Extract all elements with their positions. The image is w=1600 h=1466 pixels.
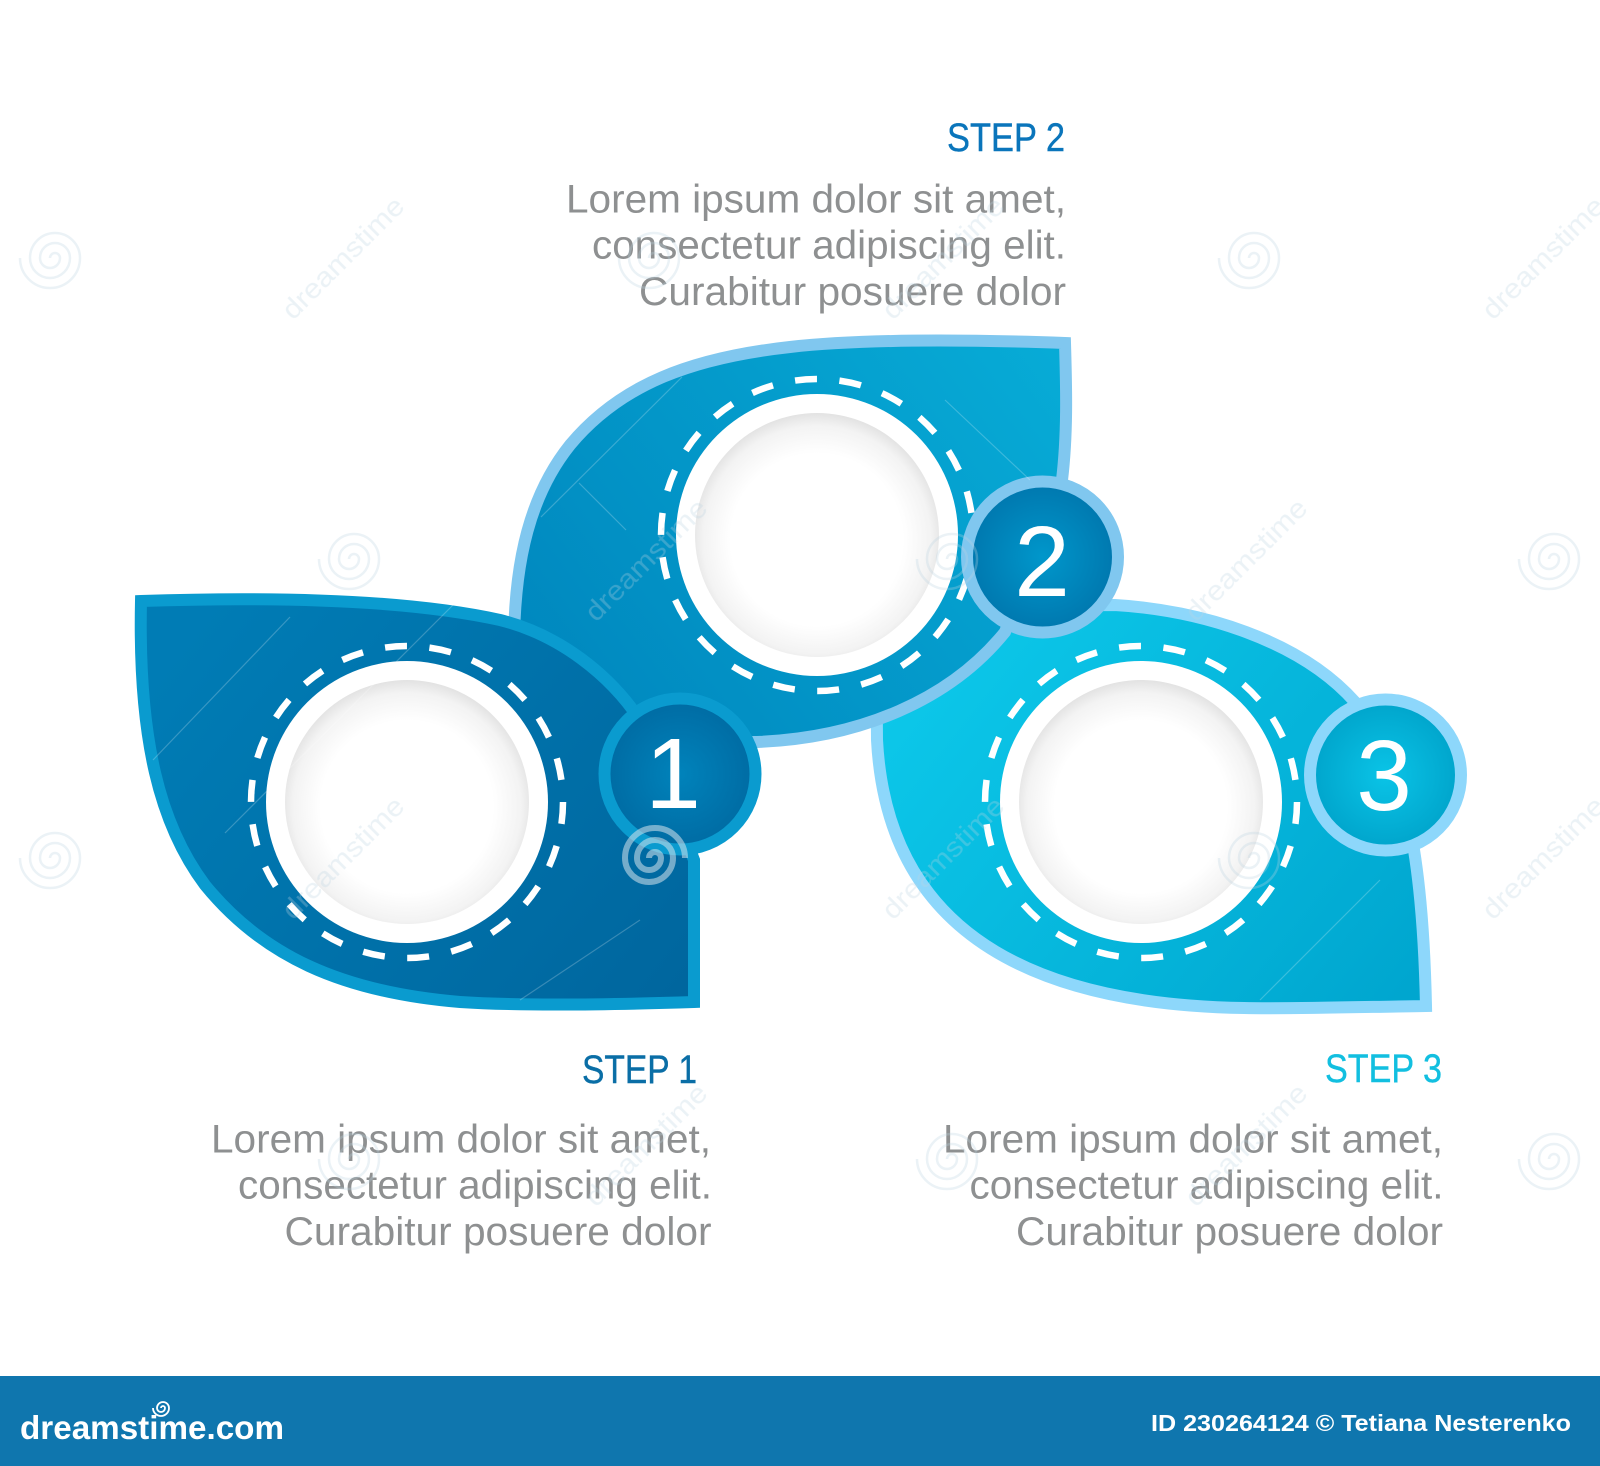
- watermark wordmarks: dreamstime: [1178, 492, 1313, 627]
- description: step 2: [566, 178, 1066, 314]
- badge: number 1: 1: [645, 718, 701, 830]
- leaf shape 2: [512, 340, 1066, 742]
- badge: number 2: 2: [1014, 506, 1070, 618]
- footer logo spiral: [153, 1402, 169, 1416]
- watermark wordmarks: [275, 190, 1600, 1212]
- panel: step 3 leaf: [876, 605, 1426, 1008]
- description: step 2: Lorem ipsum dolor sit amet,: [566, 178, 1066, 222]
- description: step 1: Curabitur posuere dolor: [284, 1210, 712, 1254]
- text block: step 2: [566, 116, 1066, 314]
- description: step 3: [943, 1117, 1444, 1254]
- description: step 3: Lorem ipsum dolor sit amet,: [943, 1117, 1443, 1161]
- watermark pattern: [20, 233, 1579, 1189]
- watermark wordmarks: dreamstime: [1178, 1077, 1313, 1212]
- badge: number 3: [1310, 700, 1461, 850]
- watermark wordmarks: dreamstime: [275, 190, 410, 325]
- watermark spiral on step 1: [625, 828, 685, 882]
- watermark wordmarks: dreamstime: [578, 492, 713, 627]
- badge: number 2: [967, 482, 1118, 632]
- panel: step 1 leaf: [141, 599, 694, 1005]
- inner disc 2: [695, 413, 939, 657]
- description: step 1: consectetur adipiscing elit.: [238, 1163, 712, 1207]
- footer bar: [0, 1376, 1600, 1466]
- footer logo: dreamstime.com: [20, 1409, 284, 1446]
- white circle 3: [1000, 661, 1282, 943]
- description: step 3: Curabitur posuere dolor: [1016, 1210, 1443, 1254]
- heading: step 1: STEP 1: [582, 1048, 697, 1092]
- description: step 2: consectetur adipiscing elit.: [592, 224, 1066, 268]
- dashed ring 2: [661, 379, 973, 691]
- badge: number 3: 3: [1356, 720, 1412, 832]
- watermark wordmarks: dreamstime: [875, 190, 1010, 325]
- footer credit: ID 230264124 © Tetiana Nesterenko: [1151, 1410, 1571, 1436]
- panel: step 2 leaf: [512, 340, 1066, 742]
- leaf shape 3: [876, 605, 1426, 1008]
- leaf shape 1: [141, 599, 694, 1005]
- description: step 1: Lorem ipsum dolor sit amet,: [211, 1117, 711, 1161]
- heading: step 2: STEP 2: [947, 116, 1065, 160]
- dashed ring 3: [985, 646, 1297, 958]
- watermark wordmarks: dreamstime: [275, 790, 410, 925]
- text block: step 1: [211, 1048, 712, 1254]
- text block: step 3: [943, 1047, 1444, 1254]
- watermark wordmarks: dreamstime: [875, 790, 1010, 925]
- description: step 1: [211, 1117, 712, 1254]
- white circle 1: [266, 661, 548, 943]
- badge: number 1: [604, 698, 756, 850]
- heading: step 3: STEP 3: [1325, 1047, 1442, 1091]
- watermark wordmarks: dreamstime: [1475, 190, 1600, 325]
- white circle 2: [676, 394, 958, 676]
- description: step 2: Curabitur posuere dolor: [639, 270, 1066, 314]
- watermark wordmarks: dreamstime: [1475, 790, 1600, 925]
- description: step 3: consectetur adipiscing elit.: [970, 1163, 1444, 1207]
- inner disc 1: [285, 680, 529, 924]
- inner disc 3: [1019, 680, 1263, 924]
- watermark wordmarks: dreamstime: [578, 1077, 713, 1212]
- dashed ring 1: [251, 646, 563, 958]
